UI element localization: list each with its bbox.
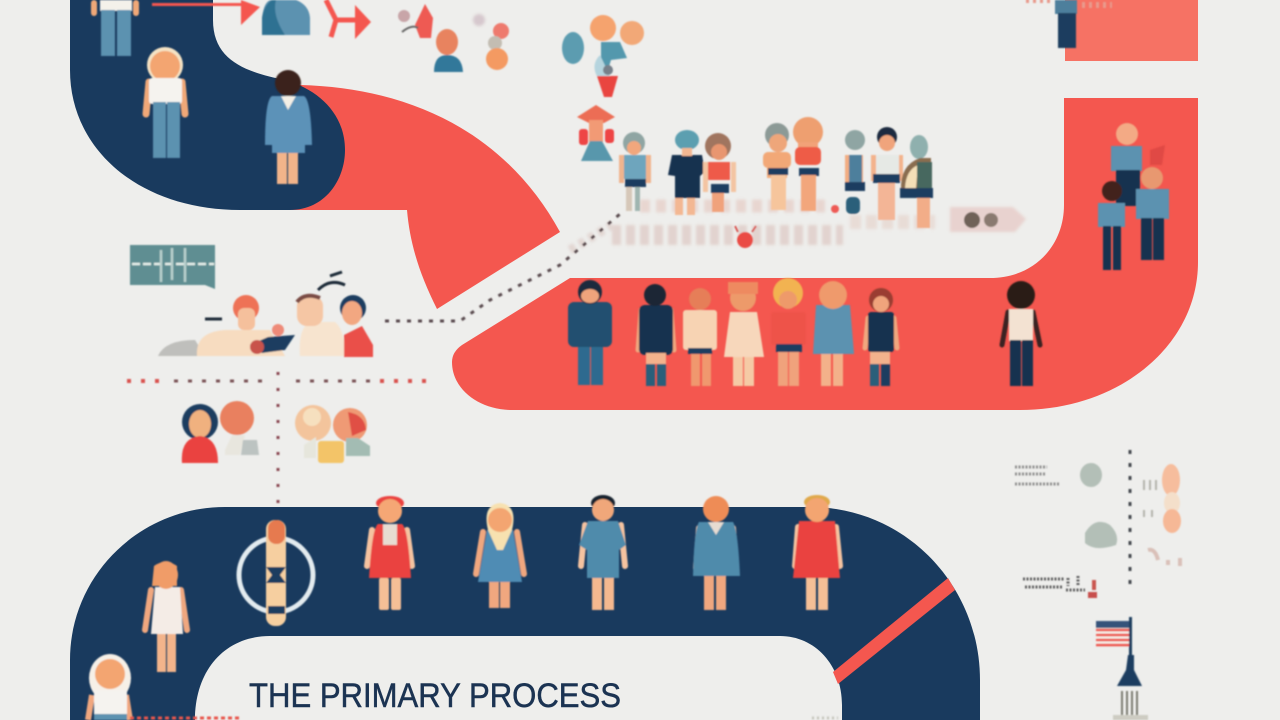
figure: top left person cut off: [91, 0, 139, 56]
figure group: right red path trio: [1098, 123, 1169, 270]
icon: avatar pair right: [295, 405, 370, 463]
figure: blonde person navy path: [146, 47, 185, 158]
icon: ring with vertical figure: [239, 520, 313, 626]
title: THE PRIMARY PROCESS: [249, 677, 621, 715]
pale smudged crowd below figures: [570, 206, 935, 250]
icon: tag with two heads: [950, 207, 1026, 232]
small marks bottom centre right: [812, 716, 838, 720]
figure: trio right: [1136, 167, 1169, 260]
figure: crowd person 8: [900, 135, 933, 228]
figure: crowd person 6: [845, 130, 865, 214]
figure: orange hair blue suit person: [693, 496, 740, 610]
panel: navy path bottom: [70, 507, 980, 720]
figure row: middle crowd: [619, 117, 933, 228]
figure: red band person 5: [771, 278, 806, 386]
icon: avatar pair left: [182, 401, 259, 463]
icon: american flag on capitol: [1096, 617, 1148, 720]
figure: crowd person 5: [793, 117, 823, 211]
figure: red hat person: [577, 105, 615, 161]
panel: red path middle: [280, 85, 560, 309]
icon: scattered people top centre: [398, 4, 644, 97]
panel: navy path top left: [70, 0, 345, 210]
icon: small red marker: [735, 205, 839, 248]
icon: red arrow two: [326, 0, 371, 39]
figure: red dress person: [367, 496, 412, 610]
figure: red band person 3: [683, 288, 717, 386]
smudged notes and dots bottom right: [1015, 450, 1181, 598]
figure: crowd person 4: [763, 123, 791, 210]
dotted divider vertical: [276, 372, 280, 515]
figure: dark haired person blue dress: [265, 70, 312, 184]
icon: red arrow one: [152, 0, 260, 25]
figure: trio left: [1098, 181, 1125, 270]
figure: crowd person 2: [668, 130, 705, 215]
figure: red band person 4: [724, 282, 764, 386]
figure: red band person 2: [638, 284, 674, 386]
figure: white dress person bottom left: [145, 561, 187, 672]
figure: crowd person 3: [703, 133, 736, 212]
red diagonal stripe: [833, 578, 955, 684]
figure: crowd person 1: [619, 132, 651, 211]
panel: large red path right: [452, 98, 1198, 410]
figure: red band person 1: [568, 280, 612, 385]
figure: dark hair blue dress person: [579, 495, 626, 610]
red dash strip bottom: [130, 716, 240, 720]
people group discussing: [158, 272, 373, 357]
figure: crowd person 7: [871, 127, 903, 220]
figure: red band person 6: [813, 281, 854, 386]
chat bubble: [130, 245, 215, 289]
figure: red band person 8: [1002, 281, 1040, 386]
panel: top right salmon block: [1065, 0, 1198, 61]
figure: trio top: [1111, 123, 1142, 206]
figure: red band person 7: [865, 288, 897, 386]
icon: blue dome: [262, 0, 310, 35]
figure: blonde blue dress person: [476, 503, 524, 608]
figure: blond hair red dress person: [793, 495, 840, 610]
dotted connector to crowd: [385, 214, 620, 321]
figure: top right person cut off: [1026, 0, 1112, 48]
figure: blonde person corner: [88, 654, 131, 720]
figure row: red band crowd: [568, 278, 1040, 386]
dotted divider horizontal: [127, 379, 435, 383]
